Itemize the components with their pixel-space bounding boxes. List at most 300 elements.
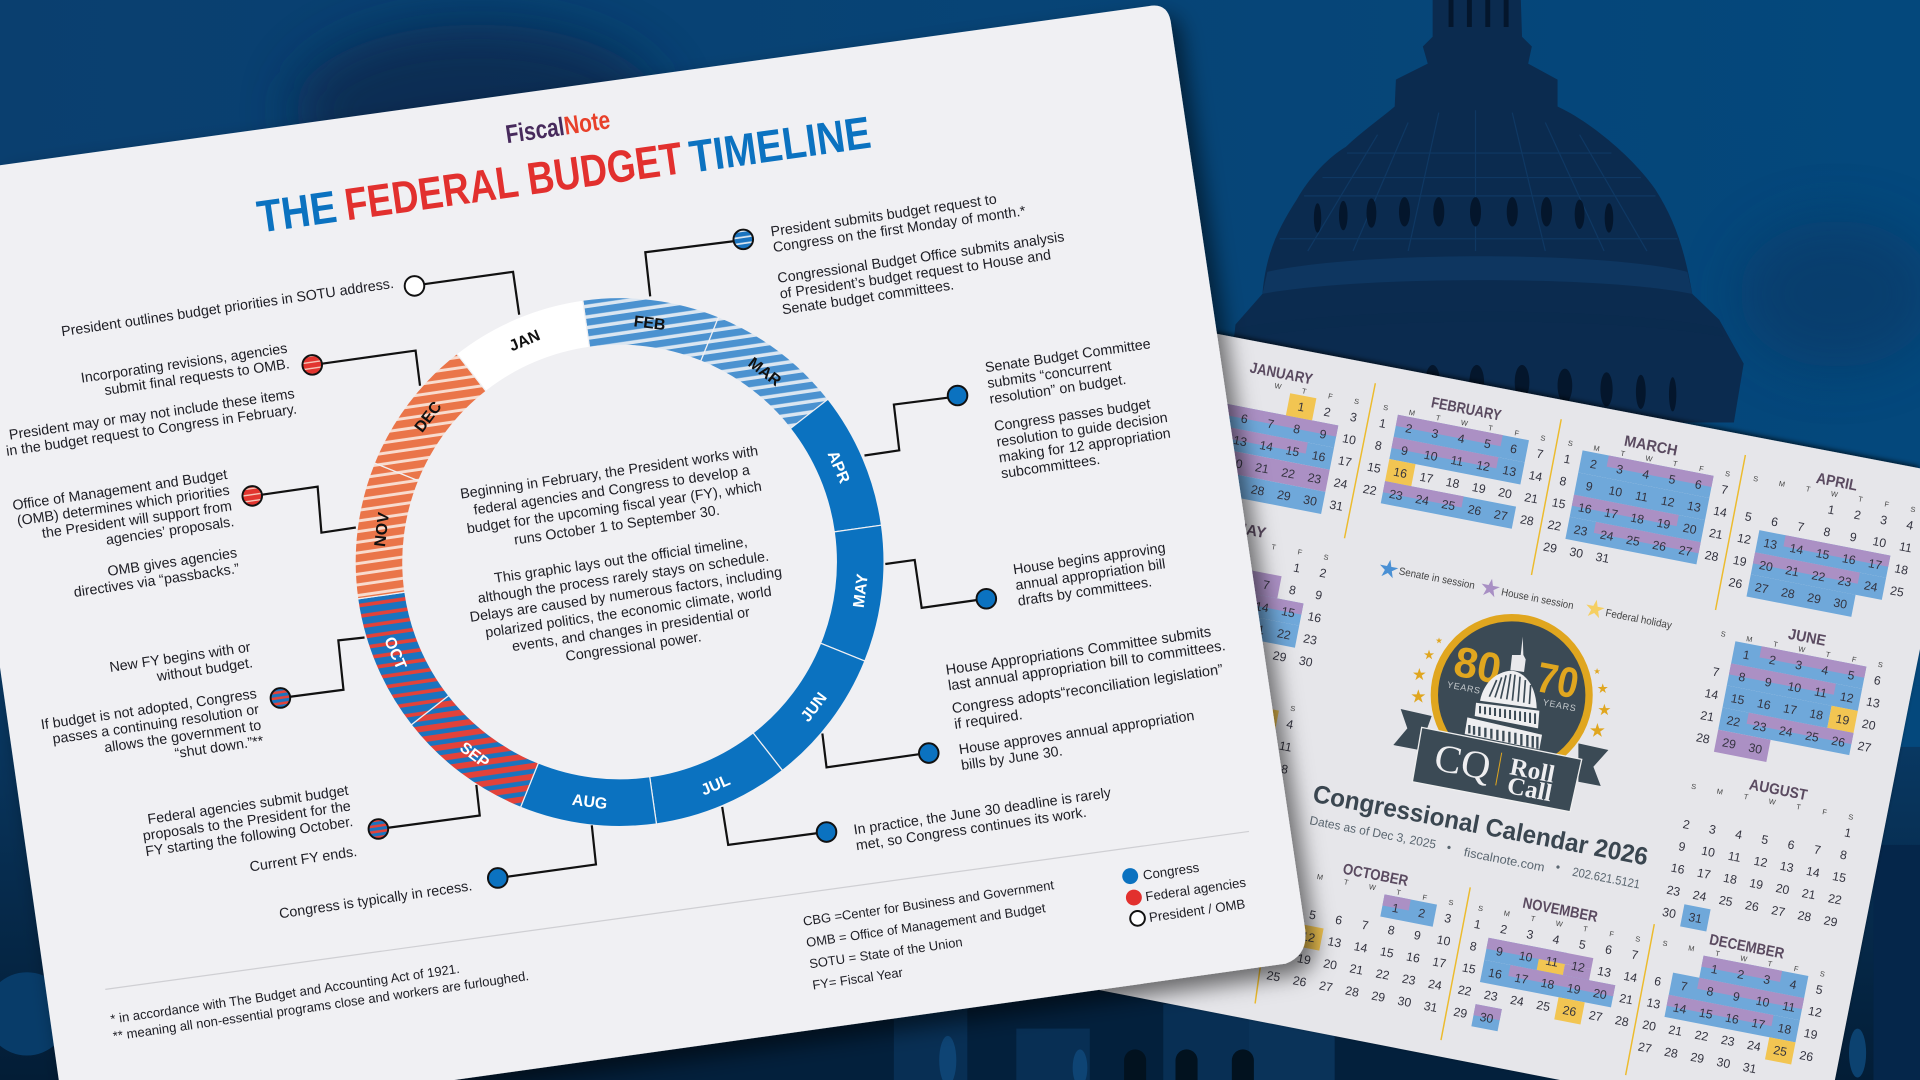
abbreviations: SOTU = State of the Union: [808, 934, 963, 971]
segment: April: [790, 399, 882, 532]
callout: October new FY: [108, 640, 254, 692]
calendar: March: 8: [1558, 474, 1568, 489]
calendar: February: S: [1540, 433, 1546, 443]
calendar: October: 20: [1322, 956, 1338, 973]
title: TIMELINE: [686, 107, 874, 183]
calendar: August: 27: [1770, 903, 1786, 919]
calendar: June: 21: [1699, 708, 1715, 725]
calendar: October: [1265, 866, 1459, 1015]
calendar: February: 5: [1483, 436, 1492, 452]
calendar: December: 3: [1762, 972, 1772, 987]
callout: April Congress: [993, 394, 1174, 482]
calendar: April: 2: [1853, 508, 1862, 523]
calendar: March: 24: [1599, 528, 1615, 544]
panel: Congressional Calendar 2026: [1100, 329, 1920, 1080]
calendar: March: W: [1645, 453, 1653, 464]
calendar: April: 20: [1758, 558, 1774, 574]
calendar: March: 30: [1568, 545, 1585, 561]
anniversary numerals: 80: [1450, 638, 1505, 694]
callout: December President: in the budget request to Congress in February.: [5, 402, 298, 460]
calendar: December: 2: [1736, 967, 1746, 982]
anniversary numerals: YEARS: [1446, 680, 1481, 696]
calendar: January: 30: [1302, 492, 1318, 509]
calendar: August: F: [1822, 807, 1828, 817]
calendar: February: 16: [1392, 465, 1408, 481]
calendar: April: S: [1753, 474, 1759, 484]
calendar: October: 27: [1318, 978, 1334, 995]
calendar contact line: 202.621.5121: [1571, 865, 1641, 892]
key: President / OMB: President / OMB: [1148, 896, 1246, 925]
text block: intro paragraph 1: runs October 1 to September 30.: [513, 503, 721, 549]
calendar: May: 22: [1276, 626, 1292, 643]
footnotes: * in accordance with The Budget and Accounting Act of 1921.: [109, 961, 461, 1027]
connector: June: [822, 733, 918, 767]
calendar: January: 28: [1250, 482, 1266, 499]
marker: January: [405, 276, 424, 296]
calendar: March: 13: [1686, 499, 1702, 515]
calendar: June: 24: [1778, 723, 1794, 740]
calendar: November: 5: [1578, 937, 1587, 952]
calendar: June: 22: [1725, 713, 1742, 730]
calendar: November: 19: [1566, 981, 1582, 997]
calendar: November: T: [1582, 924, 1589, 934]
calendar: December: 14: [1672, 1000, 1688, 1017]
segment: February: [583, 298, 719, 361]
month title: November: NOVEMBER: [1521, 895, 1599, 926]
calendar: February: F: [1514, 428, 1520, 438]
calendar: January: 27: [1223, 477, 1240, 494]
calendar: April: 11: [1898, 539, 1913, 556]
calendar: April: 5: [1744, 509, 1753, 524]
segment: October: [358, 592, 449, 725]
calendar: July: 18: [1273, 761, 1289, 777]
calendar: May: 21: [1250, 621, 1266, 638]
calendar: March: F: [1698, 464, 1705, 474]
calendar: April: W: [1830, 489, 1839, 499]
calendar: October: S: [1448, 898, 1454, 907]
calendar: August: 12: [1753, 854, 1769, 870]
anniversary numerals: 70: [1532, 653, 1583, 708]
connector: December: [322, 351, 420, 386]
callout: April Congress: Congress passes budget: [993, 396, 1152, 435]
calendar: November: 16: [1487, 966, 1503, 982]
calendar: December: 17: [1750, 1016, 1766, 1032]
connector: May: [885, 560, 977, 608]
calendar contact line: Dates as of Dec 3, 2025: [1308, 813, 1437, 852]
calendar: June: 6: [1873, 673, 1882, 688]
calendar: July: S: [1290, 704, 1296, 713]
calendar: June: M: [1746, 634, 1753, 644]
callout: November OMB: [11, 467, 235, 561]
calendar: December: 25: [1772, 1043, 1788, 1059]
calendar: April: 18: [1893, 561, 1910, 578]
calendar: April: 15: [1815, 546, 1831, 562]
calendar: August: T: [1743, 792, 1750, 802]
marker: August: [488, 868, 508, 888]
calendar: December: 18: [1776, 1021, 1793, 1037]
callout: November OMB: (OMB) determines which priorities: [16, 483, 231, 529]
text block: intro paragraph 1: federal agencies and Congress to develop a: [473, 462, 751, 519]
calendar: January: W: [1274, 381, 1282, 391]
calendar: October: 6: [1334, 913, 1344, 928]
callout: May House: drafts by committees.: [1017, 574, 1153, 610]
calendar: February: M: [1408, 408, 1416, 418]
month title: January: JANUARY: [1248, 360, 1314, 388]
calendar: April: T: [1858, 494, 1864, 504]
icon: holiday star: [1584, 598, 1606, 619]
callout: January SOTU: President outlines budget priorities in SOTU address.: [60, 276, 395, 340]
calendar: June: F: [1851, 655, 1858, 664]
calendar: February: 27: [1493, 507, 1509, 524]
callout: October new FY: without budget.: [155, 655, 254, 685]
logo: CQ Roll Call 80/70 years: [1393, 618, 1610, 812]
calendar: October: 9: [1413, 928, 1422, 943]
calendar: January: T: [1301, 386, 1308, 396]
calendar: August: W: [1768, 797, 1777, 807]
calendar: March: S: [1567, 438, 1574, 448]
calendar: November: 23: [1483, 988, 1499, 1004]
calendar: October: 31: [1423, 999, 1439, 1015]
connector: July: [722, 807, 817, 845]
calendar: June: 2: [1768, 653, 1777, 668]
marker: June: [919, 743, 939, 763]
calendar: August: 7: [1813, 843, 1822, 858]
month labels: NOV: [372, 511, 393, 548]
calendar: August: 17: [1696, 866, 1712, 882]
calendar: February: 18: [1445, 475, 1461, 491]
calendar: October: 23: [1401, 972, 1417, 988]
calendar: November: 22: [1457, 983, 1473, 999]
calendar: February: 1: [1378, 416, 1388, 431]
calendar: February: T: [1487, 423, 1494, 433]
callout: February CBO: [776, 229, 1070, 318]
calendar: October: 24: [1427, 977, 1443, 993]
calendar: August: 16: [1670, 861, 1686, 877]
calendar: October: 13: [1326, 934, 1343, 951]
calendar: March: T: [1672, 459, 1679, 469]
calendar: January: 9: [1318, 427, 1328, 442]
calendar: March: 15: [1551, 495, 1567, 512]
calendar: February: 26: [1467, 502, 1483, 519]
calendar: January: 3: [1349, 410, 1358, 425]
logo: FiscalNote: FiscalNote: [504, 106, 612, 149]
calendar: December: 24: [1746, 1038, 1762, 1054]
marker: October: [271, 688, 290, 708]
calendar: June: 4: [1820, 663, 1830, 678]
calendar: August: 11: [1727, 849, 1742, 865]
banner: Roll: [1508, 753, 1557, 789]
month labels: APR: [824, 448, 853, 486]
calendar: August: 9: [1677, 839, 1687, 854]
calendar: October: W: [1368, 882, 1377, 892]
callout: February CBO: Senate budget committees.: [781, 277, 955, 318]
calendar: January: 13: [1232, 433, 1248, 449]
callout: April Senate: Senate Budget Committee: [984, 336, 1152, 376]
callout: June House: bills by June 30.: [960, 743, 1064, 774]
callout: June House: House approves annual appropriation: [958, 708, 1195, 758]
calendar: January: 22: [1280, 465, 1296, 482]
segment: November: [355, 463, 419, 599]
calendar: November: 18: [1540, 976, 1556, 992]
connector: October: [290, 637, 365, 697]
calendar: October: 5: [1308, 908, 1317, 923]
calendar: June: T: [1825, 650, 1832, 659]
calendar: February: 23: [1388, 487, 1404, 503]
banner: CQ: [1431, 735, 1494, 789]
calendar: March: 21: [1708, 526, 1724, 542]
connector: November: [262, 487, 356, 533]
calendar: November: 14: [1622, 969, 1639, 985]
label: Federal holiday: Federal holiday: [1604, 607, 1673, 632]
abbreviations: CBG =Center for Business and Government: [802, 877, 1055, 929]
calendar: November: 11: [1544, 954, 1560, 970]
calendar: November: 15: [1461, 960, 1477, 977]
calendar: April: 21: [1784, 563, 1800, 579]
calendar: March: 6: [1694, 477, 1703, 492]
calendar: June: T: [1773, 639, 1779, 649]
calendar: October: 30: [1396, 994, 1413, 1010]
calendar: January: 16: [1311, 448, 1327, 465]
calendar: December: 13: [1645, 995, 1662, 1012]
callout: December President: President may or may not include these items: [8, 386, 296, 444]
calendar: March: 12: [1660, 494, 1676, 510]
calendar: March: T: [1620, 449, 1626, 458]
calendar: November: 3: [1525, 927, 1535, 942]
calendar: December: 20: [1641, 1017, 1657, 1034]
calendar: April: T: [1805, 484, 1812, 494]
calendar: February: 9: [1400, 443, 1409, 458]
calendar: December: 28: [1663, 1045, 1679, 1061]
callout: September FY ends: Current FY ends.: [249, 844, 358, 876]
text block: intro paragraph 1: Beginning in February, the President works with: [459, 443, 759, 503]
calendar: August: 26: [1744, 898, 1760, 914]
callout: November OMB: the President will support from: [41, 498, 233, 542]
calendar: November: 4: [1551, 932, 1561, 947]
month title: June: JUNE: [1787, 626, 1827, 650]
calendar contact line: fiscalnote.com: [1463, 845, 1546, 875]
calendar: May: [1160, 525, 1334, 670]
calendar: November: 29: [1452, 1005, 1469, 1021]
callout: October continuing resolution: If budget is not adopted, Congress: [40, 686, 258, 733]
calendar: August: M: [1716, 787, 1724, 797]
calendar: October: 3: [1443, 911, 1453, 926]
calendar: June: 17: [1782, 701, 1798, 718]
calendar: February: 12: [1475, 458, 1491, 474]
calendar: June: 27: [1856, 739, 1873, 755]
calendar: February: 25: [1440, 497, 1457, 513]
calendar: December: 22: [1694, 1028, 1710, 1044]
calendar: February: 28: [1519, 512, 1535, 529]
calendar: April: [1727, 473, 1920, 626]
callout: June Appropriations: last annual appropriation bill to committees.: [947, 638, 1227, 694]
calendar: February: 17: [1418, 470, 1435, 486]
calendar: June: 1: [1742, 648, 1751, 663]
calendar: November: [1452, 903, 1646, 1056]
calendar: January: S: [1353, 396, 1360, 406]
calendar: October: 19: [1296, 951, 1312, 968]
text block: intro paragraph 1: [459, 443, 767, 555]
calendar: June: S: [1720, 629, 1727, 639]
calendar: November: 27: [1588, 1008, 1604, 1024]
segment: December: [374, 354, 486, 481]
calendar: January: 20: [1228, 455, 1244, 471]
calendar: July: [1236, 697, 1301, 799]
calendar: May: 30: [1298, 653, 1314, 670]
calendar: February: 22: [1362, 482, 1378, 498]
calendar: December: S: [1662, 938, 1669, 948]
month title: February: FEBRUARY: [1430, 394, 1503, 425]
calendar: April: 28: [1780, 585, 1796, 602]
banner: [1412, 727, 1582, 812]
calendar: December: M: [1688, 943, 1695, 953]
calendar: February: 15: [1366, 460, 1382, 476]
calendar: March: 7: [1720, 482, 1729, 497]
calendar: December: 31: [1742, 1060, 1758, 1076]
callout: May House: annual appropriation bill: [1014, 556, 1166, 594]
anniversary numerals: YEARS: [1542, 697, 1577, 713]
callout: February CBO: of President’s budget request to House and: [779, 247, 1052, 303]
calendar: March: [1542, 438, 1735, 586]
calendar: May: 7: [1262, 578, 1271, 593]
calendar: August: 13: [1779, 859, 1795, 875]
calendar: November: 17: [1513, 971, 1530, 987]
calendar: August: 6: [1786, 837, 1796, 852]
calendar: May: 1: [1292, 561, 1302, 576]
calendar: February: 2: [1404, 421, 1414, 436]
calendar: March: 17: [1603, 505, 1619, 522]
calendar: March: 3: [1615, 462, 1625, 477]
calendar contact line: [1308, 813, 1641, 892]
callout: November OMB: agencies’ proposals.: [105, 514, 235, 549]
calendar: February: 7: [1535, 447, 1545, 462]
calendar: January: 8: [1292, 422, 1302, 437]
segment: May: [821, 525, 884, 661]
marker: February: [733, 230, 753, 249]
calendar: January: F: [1327, 391, 1334, 401]
month title: August: AUGUST: [1748, 776, 1809, 804]
label: House in session: House in session: [1500, 586, 1575, 612]
calendar: June: S: [1877, 660, 1884, 670]
callout: May House: House begins approving: [1012, 540, 1167, 578]
calendar: October: 8: [1387, 923, 1396, 938]
calendar: April: 3: [1879, 513, 1889, 528]
callout: June reconciliation: if required.: [953, 707, 1024, 733]
calendar: November: 21: [1618, 991, 1634, 1007]
calendar: April: 26: [1727, 575, 1744, 591]
calendar: April: 27: [1754, 580, 1770, 596]
callout: April Senate: [984, 336, 1156, 408]
marker: May: [977, 589, 996, 609]
text block: intro paragraph 2: events, and changes in presidential or: [511, 605, 751, 655]
calendar: June: 5: [1846, 668, 1856, 683]
calendar: June: 19: [1835, 712, 1851, 728]
calendar: March: 28: [1704, 548, 1720, 564]
calendar: December: 1: [1710, 962, 1719, 977]
calendar: May: S: [1323, 552, 1329, 562]
callout: September agencies: Federal agencies submit budget: [147, 783, 350, 828]
calendar: April: 6: [1770, 514, 1779, 529]
callout: November passbacks: OMB gives agencies: [107, 545, 238, 580]
calendar: January: 6: [1240, 412, 1249, 427]
calendar: August: 18: [1722, 871, 1738, 887]
calendar: November: 1: [1473, 917, 1482, 932]
calendar: October: 12: [1300, 929, 1316, 945]
calendar: December: 29: [1689, 1050, 1705, 1066]
callout: October new FY: New FY begins with or: [108, 640, 252, 676]
calendar: January: 21: [1254, 460, 1270, 477]
calendar: October: F: [1422, 893, 1428, 902]
title: FEDERAL BUDGET: [341, 132, 686, 230]
calendar: June: 29: [1721, 735, 1737, 752]
calendar: June: 13: [1865, 695, 1881, 711]
calendar: October: 28: [1344, 983, 1360, 1000]
banner: Call: [1505, 772, 1554, 807]
calendar: December: 10: [1755, 994, 1771, 1010]
callout: June Appropriations: House Appropriations Committee submits: [945, 624, 1212, 679]
calendar: February: [1361, 402, 1551, 533]
icon: Capitol dome: [1465, 637, 1542, 749]
callout: June reconciliation: Congress adopts“reconciliation legislation”: [951, 662, 1224, 717]
calendar: March: 26: [1651, 538, 1667, 554]
month labels: FEB: [633, 313, 666, 334]
calendar: February: 19: [1471, 480, 1487, 496]
month labels: DEC: [412, 398, 446, 436]
calendar: April: 24: [1863, 578, 1879, 595]
abbreviations: FY= Fiscal Year: [811, 965, 904, 993]
calendar: May: 8: [1288, 583, 1297, 598]
calendar: March: 9: [1585, 479, 1594, 494]
title: [254, 107, 874, 243]
callout: November passbacks: directives via “passbacks.”: [73, 561, 241, 601]
month labels: [372, 313, 872, 813]
callout: October continuing resolution: allows the government to: [103, 718, 262, 756]
label: Senate in session: Senate in session: [1398, 565, 1476, 592]
segment: September: [411, 696, 538, 807]
calendar: March: 20: [1682, 521, 1698, 537]
calendar: June: 26: [1830, 734, 1846, 750]
calendar: June: 28: [1695, 730, 1711, 747]
calendar: June: 30: [1747, 740, 1764, 757]
marker: September: [369, 819, 388, 839]
segment: August: [521, 763, 656, 827]
calendar: March: 11: [1634, 489, 1649, 505]
calendar: April: 10: [1871, 534, 1888, 551]
calendar: December: 6: [1653, 974, 1663, 989]
calendar: March: 18: [1629, 511, 1646, 527]
calendar: March: 14: [1712, 504, 1728, 520]
calendar: February: 6: [1509, 442, 1519, 457]
calendar: August: 23: [1665, 883, 1682, 899]
calendar: August: 2: [1682, 817, 1691, 832]
calendar: July: 4: [1285, 717, 1295, 732]
month labels: SEP: [456, 739, 492, 772]
calendar: June: 18: [1808, 706, 1825, 723]
calendar: August: 21: [1801, 886, 1817, 902]
calendar: March: S: [1724, 469, 1731, 479]
callout: October continuing resolution: [40, 686, 265, 781]
calendar: February: 24: [1414, 492, 1430, 508]
callout: April Congress: making for 12 appropriation: [998, 426, 1172, 466]
month title: March: MARCH: [1623, 433, 1679, 460]
calendar: December: 26: [1798, 1048, 1815, 1064]
calendar: August: 14: [1805, 864, 1821, 880]
calendar: December: F: [1793, 964, 1800, 974]
calendar: November: S: [1635, 934, 1641, 944]
calendar: May: 9: [1314, 588, 1324, 603]
calendar: March: 27: [1677, 543, 1694, 559]
segment: July: [650, 733, 782, 824]
calendar: December: S: [1819, 969, 1826, 979]
